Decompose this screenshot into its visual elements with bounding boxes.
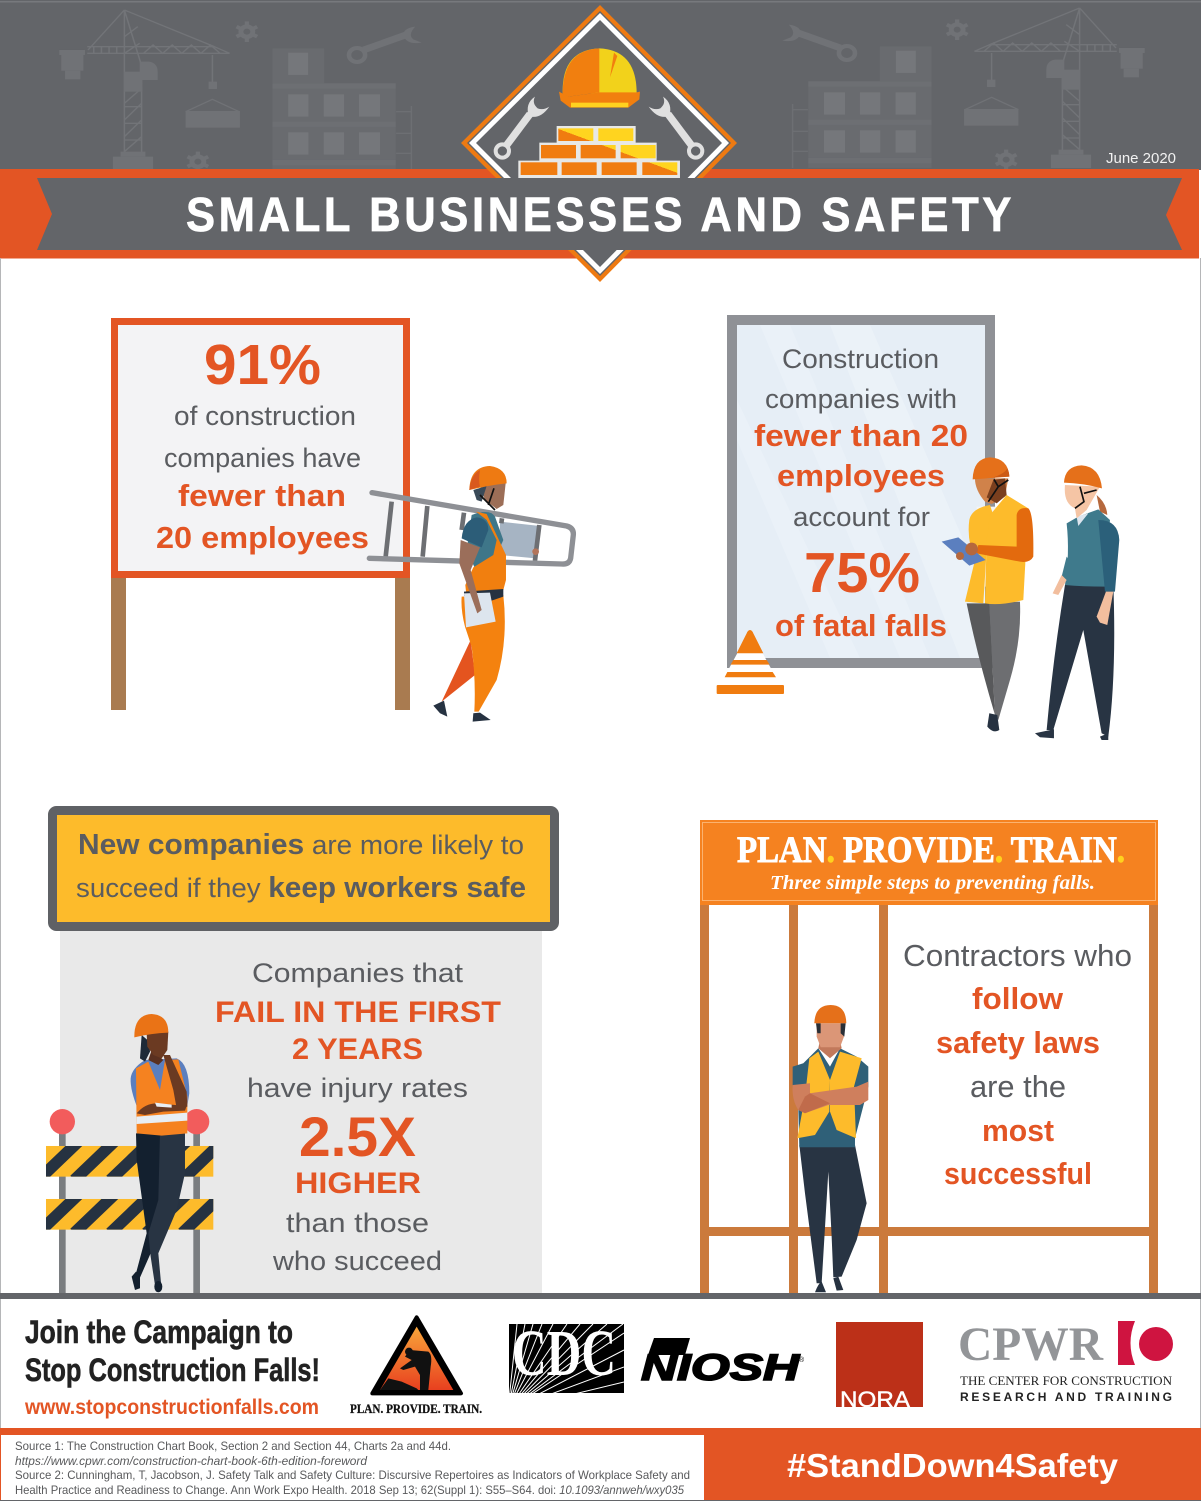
logo subtitle: THE CENTER FOR CONSTRUCTION (960, 1373, 1173, 1388)
text: most successful: successful (944, 1156, 1092, 1191)
icon: right wrench (649, 97, 702, 158)
source 1: Source 1: The Construction Chart Book, Section 2 and Section 44, Charts 2a and 44d. (15, 1439, 451, 1453)
campaign text (24, 1314, 320, 1419)
text: than those who succeed: than those (286, 1208, 429, 1238)
text: fail in the first 2 years: 2 YEARS (292, 1033, 423, 1066)
text: of construction companies have (164, 401, 361, 473)
text: fewer than 20 employees: 20 employees (156, 520, 369, 555)
logo: CDC: CDC (512, 1317, 616, 1390)
text: Construction companies with: companies with (765, 384, 957, 414)
icon: traffic cone (717, 630, 784, 694)
bottom edge (0, 1500, 1201, 1501)
campaign text: Stop Construction Falls! (25, 1352, 320, 1388)
logo: NIOSH (641, 1338, 805, 1388)
diamond emblem (461, 5, 737, 282)
panel: plan provide train frame (700, 905, 1158, 1293)
text: Contractors who: Contractors who (903, 938, 1132, 973)
stat: 75%: 75% (804, 541, 920, 605)
text: are the: are the (970, 1069, 1066, 1104)
banner: plan provide train (700, 820, 1158, 905)
panel: sources: Health Practice and Readiness to Change. Ann Work Expo Health. 2018 Sep 13; 62(Suppl 1): S55–S64. doi: 10.1093/annweh/wxy035 (15, 1483, 684, 1497)
text: new companies line: New companies are more likely to (78, 829, 524, 861)
text: fail in the first 2 years: FAIL IN THE FIRST (215, 996, 501, 1029)
panel: injury rates (60, 931, 542, 1293)
bottom band (0, 1428, 1201, 1500)
date: June 2020 (1106, 151, 1176, 167)
stat: 2.5X: 2.5X (299, 1105, 416, 1168)
source 2: Source 2: Cunningham, T, Jacobson, J. Safety Talk and Safety Culture: Discursive Repertoires as Indicators of Workplace Safety and (15, 1468, 690, 1482)
subheading: Three simple steps to preventing falls. (770, 872, 1095, 894)
illustration: woman leaning on barricade (131, 1014, 189, 1292)
illustration: supervisor with tablet (942, 457, 1033, 731)
icon: hard hat (559, 48, 640, 108)
text: fewer than 20 employees: fewer than 20 (754, 418, 968, 453)
logo caption: PLAN. PROVIDE. TRAIN. (350, 1401, 482, 1416)
text: fewer than 20 employees: fewer than (178, 478, 346, 513)
text: higher: HIGHER (295, 1167, 421, 1200)
text: Construction companies with: Construction (782, 344, 939, 374)
text: follow safety laws: follow (972, 981, 1064, 1016)
text: have injury rates: have injury rates (247, 1073, 468, 1103)
logo: CPWR: CPWR (958, 1318, 1104, 1371)
link: campaign url: www.stopconstructionfalls.com (24, 1396, 319, 1419)
panel: 75% sign (727, 315, 995, 668)
text: keep workers safe line: succeed if they keep workers safe (76, 872, 526, 904)
logo: NIOSH: ® (799, 1356, 805, 1364)
text block: contractors (903, 938, 1132, 1191)
text: account for: account for (793, 502, 930, 532)
logo: CDC (509, 1324, 624, 1393)
logo: plan provide train triangle (350, 1317, 482, 1416)
text: of construction companies have: companies have (164, 443, 361, 473)
footer divider (0, 1293, 1201, 1299)
logo: CPWR: RESEARCH AND TRAINING (960, 1390, 1172, 1404)
text: follow safety laws (936, 981, 1100, 1060)
text: Join the Campaign: Join the Campaign to (25, 1314, 293, 1350)
illustration: worker carrying ladder (369, 466, 573, 722)
header background with construction scene (0, 0, 1201, 172)
text: of construction companies have: of construction (174, 401, 356, 431)
logo: NORA (836, 1322, 923, 1412)
title ribbon (37, 178, 1182, 250)
illustration: road barricade (38, 1109, 222, 1293)
heading: plan provide train: PLAN. PROVIDE. TRAIN. (737, 830, 1125, 871)
text: Construction companies with (765, 344, 957, 414)
text: fail in the first 2 years (215, 996, 501, 1066)
icon: brick pile (518, 126, 680, 178)
text: Companies that: Companies that (252, 958, 464, 988)
callout: new companies (52, 810, 554, 926)
text: than those who succeed (272, 1208, 442, 1276)
title: SMALL BUSINESSES AND SAFETY (186, 189, 1015, 242)
left construction scene (59, 10, 422, 172)
source 1 link: https://www.cpwr.com/construction-chart-book-6th-edition-foreword (15, 1454, 367, 1468)
illustration: woman in teal top (1035, 465, 1119, 740)
icon: left wrench (496, 97, 549, 158)
text block: injury rates (215, 958, 501, 1276)
text: most successful (944, 1113, 1092, 1191)
logo: NIOSH: NIOSH (641, 1347, 801, 1388)
right construction scene (782, 8, 1145, 170)
logo: CPWR (958, 1318, 1173, 1404)
text: fewer than 20 employees (754, 418, 968, 493)
logo: NORA: NORA (840, 1387, 910, 1412)
text: of fatal falls: of fatal falls (775, 608, 947, 643)
text: fewer than 20 employees: employees (777, 458, 945, 493)
text: most successful: most (982, 1113, 1054, 1148)
text: follow safety laws: safety laws (936, 1025, 1100, 1060)
orange banner band (0, 169, 1199, 258)
text: than those who succeed: who succeed (272, 1246, 442, 1276)
panel: sources (1, 1435, 704, 1500)
text: fewer than 20 employees (156, 478, 369, 555)
panel: 91% sign (111, 322, 410, 710)
hashtag: #StandDown4Safety (787, 1447, 1119, 1484)
stat: 91%: 91% (204, 333, 321, 397)
illustration: worker with crossed arms (793, 1005, 868, 1292)
